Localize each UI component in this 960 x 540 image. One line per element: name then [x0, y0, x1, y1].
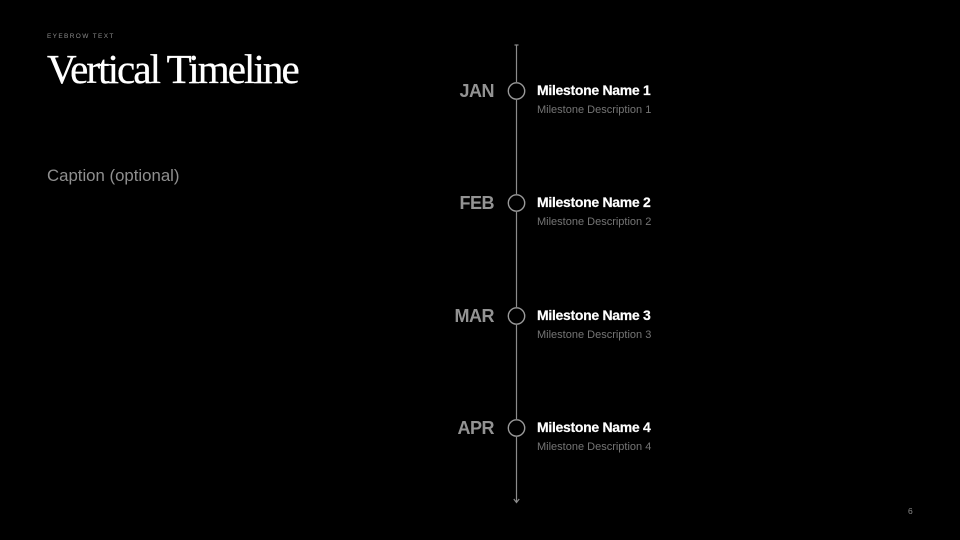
milestone 3 name: Milestone Name 3 — [537, 307, 650, 323]
milestone 2 name: Milestone Name 2 — [537, 194, 650, 210]
marker circles — [508, 83, 525, 436]
milestone 4 name: Milestone Name 4 — [537, 419, 650, 435]
milestone 1 description: Milestone Description 1 — [537, 104, 651, 116]
title: Vertical Timeline — [47, 46, 298, 92]
month: MAR: MAR — [454, 306, 494, 326]
milestone 2 description: Milestone Description 2 — [537, 216, 651, 228]
eyebrow text: EYEBROW TEXT — [47, 33, 115, 40]
month: APR: APR — [457, 418, 494, 438]
axis line — [514, 45, 519, 502]
milestone 4 description: Milestone Description 4 — [537, 441, 651, 453]
caption: Caption (optional) — [47, 166, 179, 185]
page number: 6 — [908, 506, 913, 516]
month: FEB: FEB — [460, 193, 494, 213]
month: JAN: JAN — [459, 81, 494, 101]
timeline axis with markers — [508, 44, 526, 504]
milestone 3 description: Milestone Description 3 — [537, 329, 651, 341]
milestone 1 name: Milestone Name 1 — [537, 82, 650, 98]
